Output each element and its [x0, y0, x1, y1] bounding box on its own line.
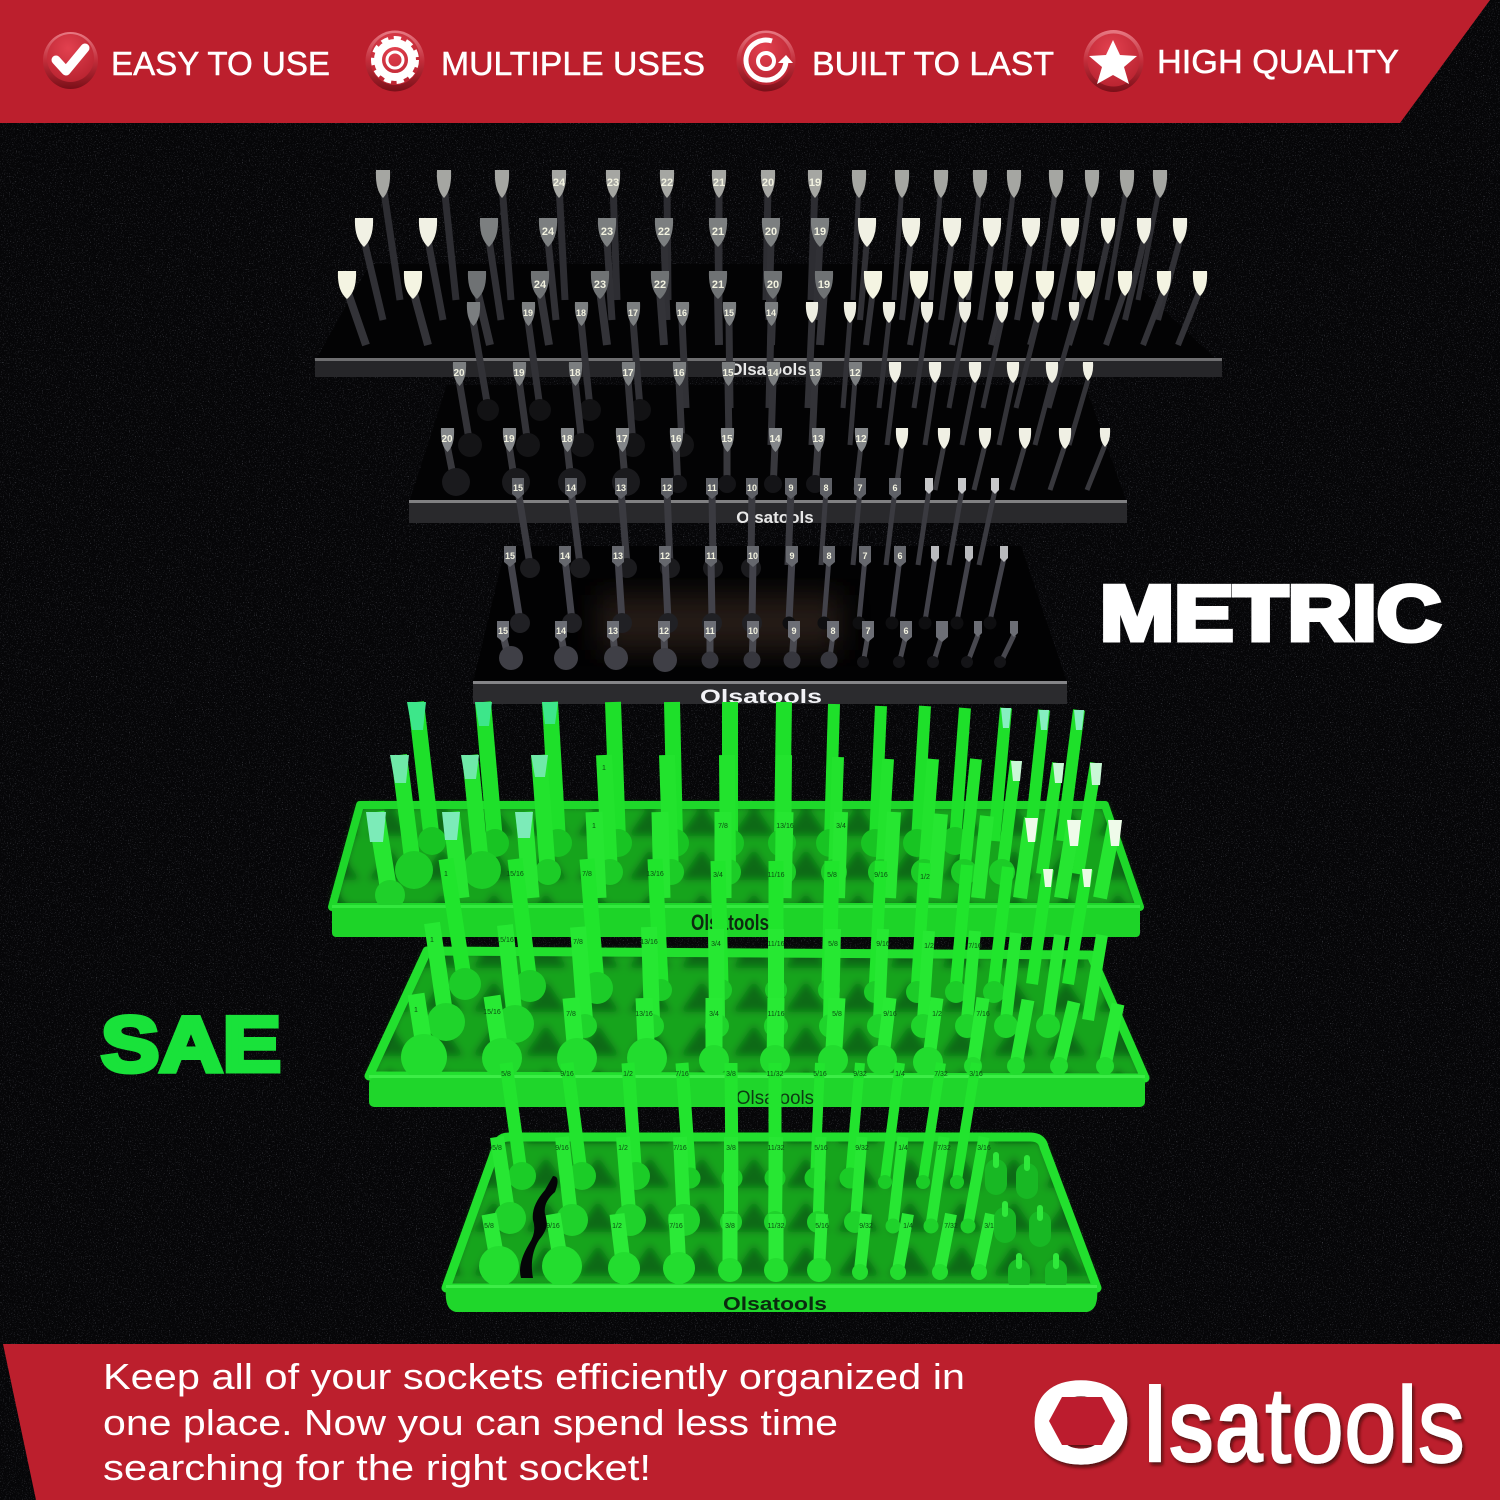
row 3 pegs: 15/16: [483, 1009, 501, 1016]
row 1 pegs: [376, 170, 1167, 300]
row 2 pegs: 9: [789, 551, 795, 561]
row 1 pegs: 3/8: [726, 1071, 736, 1078]
row 2 pegs: 10: [748, 551, 758, 561]
row 3 pegs: 15: [721, 434, 733, 445]
footer text: Keep all of your sockets efficiently organized in: [103, 1356, 965, 1397]
row 2 pegs: 24: [542, 226, 555, 238]
row 3 pegs: 7/8: [566, 1011, 576, 1018]
row 1 pegs: 15/16: [506, 871, 524, 878]
row 2 pegs: [390, 755, 1102, 874]
row 2 pegs: 5/16: [814, 1145, 828, 1152]
row 3 pegs: 11/16: [768, 1011, 785, 1018]
row 2 pegs: [355, 218, 1187, 320]
row 2 pegs: 8: [826, 551, 832, 561]
label: multiple uses: MULTIPLE USES: [441, 45, 705, 82]
footer text: [103, 1356, 965, 1488]
tray 3 logo: Olsatools: [700, 687, 822, 708]
row 3 pegs: 17: [616, 434, 628, 445]
tray 2 logo: Olsatools: [736, 1088, 814, 1109]
row 1 pegs: 1/2: [920, 874, 930, 881]
row 3 pegs: 20: [441, 434, 453, 445]
row 1 pegs: 5/8: [827, 872, 837, 879]
Olsatools logo: [1031, 1359, 1465, 1487]
SAE tray 3 (front, green): [446, 1063, 1097, 1314]
row 3 pegs: [497, 621, 1018, 664]
row 1 pegs: 7/8: [582, 871, 592, 878]
tray 3 front rim: [473, 681, 1067, 708]
row 1 pegs: 9/32: [853, 1071, 867, 1078]
tray 2 front rim: [369, 1075, 1145, 1109]
icon: gear: [366, 30, 424, 92]
row 2 pegs: 16: [673, 368, 685, 379]
row 3 pegs: 7/16: [669, 1223, 683, 1230]
row 3 pegs: 5/16: [815, 1223, 829, 1230]
row 2 pegs: 1: [602, 765, 606, 772]
row 3 pegs: 5/8: [832, 1011, 842, 1018]
row 3 pegs: [441, 428, 1110, 490]
row 1 pegs: 1/4: [895, 1071, 905, 1078]
row 3 pegs: 5/8: [484, 1223, 494, 1230]
row 3 pegs: [338, 271, 1207, 345]
icon: star: [1084, 30, 1144, 92]
row 1 pegs: [444, 859, 1092, 992]
row 1 pegs: 14: [766, 308, 776, 318]
row 1 pegs: 19: [809, 177, 821, 189]
row 1 pegs: 15: [513, 483, 523, 493]
row 2 pegs: 7/16: [673, 1145, 687, 1152]
footer text: one place. Now you can spend less time: [103, 1402, 838, 1443]
row 2 pegs: 13: [809, 368, 821, 379]
row 2 pegs: 20: [765, 226, 777, 238]
row 3 pegs: 12: [855, 434, 867, 445]
row 1 pegs: 19: [523, 308, 533, 318]
row 2 pegs: 5/8: [828, 941, 838, 948]
row 3 pegs: 3/4: [709, 1011, 719, 1018]
row 1 pegs: 22: [661, 177, 673, 189]
METRIC heading: METRIC: [1100, 569, 1441, 657]
row 3 pegs: 13: [812, 434, 824, 445]
row 3 pegs: 1/2: [932, 1011, 942, 1018]
row 3 pegs: 10: [748, 626, 758, 636]
row 3 pegs: 19: [503, 434, 515, 445]
row 2 pegs: 11: [706, 551, 716, 561]
row 2 pegs: 14: [767, 368, 779, 379]
row 1 pegs: 14: [566, 483, 576, 493]
row 3 pegs: 9/32: [859, 1223, 873, 1230]
row 3 pegs: 9/16: [883, 1011, 897, 1018]
row 2 pegs: [430, 923, 1102, 1026]
row 1 pegs: 5/8: [501, 1071, 511, 1078]
row 3 pegs: 7/32: [944, 1223, 958, 1230]
row 1 pegs: [467, 302, 1079, 410]
row 3 pegs: 1/2: [612, 1223, 622, 1230]
tray 1 logo: Olsatools: [691, 910, 769, 935]
row 3 pegs: 20: [767, 279, 779, 291]
row 3 pegs: 9: [791, 626, 797, 636]
row 2 pegs: 5/8: [492, 1145, 502, 1152]
row 2 pegs: 7/32: [937, 1145, 951, 1152]
row 1 pegs: [512, 478, 999, 568]
row 3 pegs: 14: [556, 626, 566, 636]
tray 3 front rim: [446, 1285, 1097, 1314]
row 1 pegs: 3/16: [969, 1071, 983, 1078]
row 2 pegs: 19: [814, 226, 826, 238]
label: easy to use: EASY TO USE: [111, 45, 330, 82]
row 3 pegs: 22: [654, 279, 666, 291]
row 2 pegs: 15: [722, 368, 734, 379]
footer text: searching for the right socket!: [103, 1447, 651, 1488]
row 1 pegs: 1/2: [623, 1071, 633, 1078]
row 3 pegs: 15: [498, 626, 508, 636]
row 1 pegs: 5/16: [813, 1071, 827, 1078]
row 3 pegs: 12: [659, 626, 669, 636]
tray 1 front rim: [315, 358, 1222, 379]
row 1 pegs: 10: [747, 483, 757, 493]
row 1 pegs: 9/16: [874, 872, 888, 879]
row 1 pegs: 7/16: [675, 1071, 689, 1078]
row 3 pegs: 24: [534, 279, 547, 291]
row 2 pegs: 3/16: [977, 1145, 991, 1152]
row 3 pegs: 19: [818, 279, 830, 291]
row 2 pegs: 1: [430, 937, 434, 944]
tray 2 logo: Olsatools: [736, 508, 814, 527]
row 2 pegs: [492, 1137, 991, 1226]
row 2 pegs: 15/16: [496, 937, 514, 944]
row 1 pegs: 17: [628, 308, 638, 318]
row 3 pegs: 7/16: [976, 1011, 990, 1018]
row 3 pegs: 6: [903, 626, 909, 636]
row 2 pegs: 6: [897, 551, 903, 561]
row 3 pegs: 1: [592, 823, 596, 830]
row 2 pegs: 7/8: [573, 939, 583, 946]
row 1 pegs: 21: [713, 177, 725, 189]
row 1 pegs: 18: [576, 308, 586, 318]
row 1 pegs: 11/16: [768, 872, 785, 879]
icon: check mark: [43, 32, 98, 89]
row 2 pegs: 23: [601, 226, 613, 238]
row 2 pegs: 11/32: [768, 1145, 785, 1152]
row 2 pegs: [453, 362, 1093, 445]
label: built to last: BUILT TO LAST: [812, 45, 1054, 82]
icon: circular arrow with gear: [736, 30, 796, 92]
row 2 pegs: 21: [712, 226, 724, 238]
row 3 pegs: 3/4: [836, 823, 846, 830]
row 3 pegs: [414, 994, 1118, 1066]
Olsatools logo: tools: [1265, 1364, 1465, 1485]
row 3 pegs: 8: [830, 626, 836, 636]
tray 1 logo: Olsatools: [729, 360, 807, 379]
metric tray 3 (front, black): [473, 478, 1067, 708]
row 1 pegs: 7: [857, 483, 863, 493]
row 3 pegs: 9/16: [546, 1223, 560, 1230]
row 2 pegs: 12: [849, 368, 861, 379]
row 2 pegs: 20: [453, 368, 465, 379]
row 2 pegs: 13/16: [640, 939, 658, 946]
row 2 pegs: 1/4: [898, 1145, 908, 1152]
row 3 pegs: 21: [712, 279, 724, 291]
tray 1 front rim: [332, 905, 1140, 937]
row 1 pegs: [407, 702, 1084, 843]
row 3 pegs: 18: [561, 434, 573, 445]
small drive nubs: [996, 1155, 1056, 1280]
row 1 pegs: [501, 1063, 983, 1182]
row 1 pegs: 13/16: [646, 871, 664, 878]
row 1 pegs: 3/4: [713, 872, 723, 879]
row 3 pegs: 3/8: [725, 1223, 735, 1230]
SAE tray 2 (middle, green): [369, 859, 1145, 1109]
row 2 pegs: 11/16: [768, 941, 785, 948]
row 3 pegs: 1/4: [903, 1223, 913, 1230]
row 1 pegs: 20: [762, 177, 774, 189]
row 1 pegs: 16: [677, 308, 687, 318]
row 3 pegs: 1: [414, 1007, 418, 1014]
Olsatools logo: lsa: [1143, 1364, 1264, 1485]
row 1 pegs: 13: [616, 483, 626, 493]
row 2 pegs: 14: [560, 551, 570, 561]
metric tray 2 (middle, black): [409, 302, 1127, 527]
row 2 pegs: 18: [569, 368, 581, 379]
row 3 pegs: 16: [670, 434, 682, 445]
SAE tray 1 (back, green): [332, 702, 1140, 937]
row 2 pegs: 22: [658, 226, 670, 238]
tray 2 front rim: [409, 500, 1127, 527]
row 1 pegs: 11: [707, 483, 717, 493]
row 2 pegs: 13: [613, 551, 623, 561]
row 3 pegs: 11: [705, 626, 715, 636]
row 3 pegs: 13/16: [776, 823, 794, 830]
row 3 pegs: 7/8: [718, 823, 728, 830]
row 1 pegs: 24: [553, 177, 566, 189]
footer banner: [3, 1344, 1500, 1500]
row 2 pegs: 3/8: [726, 1145, 736, 1152]
row 2 pegs: 19: [513, 368, 525, 379]
metric tray 1 (back, black): [315, 170, 1222, 379]
row 2 pegs: 3/4: [711, 941, 721, 948]
row 2 pegs: 7: [862, 551, 868, 561]
row 2 pegs: 1/2: [618, 1145, 628, 1152]
row 1 pegs: 11/32: [766, 1071, 784, 1078]
row 3 pegs: [366, 812, 1122, 898]
row 1 pegs: 12: [662, 483, 672, 493]
row 1 pegs: 9: [788, 483, 794, 493]
row 2 pegs: [504, 546, 1008, 623]
row 2 pegs: 1/2: [924, 943, 934, 950]
row 3 pegs: 13: [608, 626, 618, 636]
row 1 pegs: 8: [823, 483, 829, 493]
row 2 pegs: 15: [505, 551, 515, 561]
row 3 pegs: 7: [865, 626, 871, 636]
row 2 pegs: 7/16: [968, 943, 982, 950]
row 2 pegs: 9/32: [855, 1145, 869, 1152]
row 1 pegs: 23: [607, 177, 619, 189]
row 3 pegs: 3/16: [984, 1223, 998, 1230]
row 2 pegs: 17: [622, 368, 634, 379]
row 2 pegs: 12: [660, 551, 670, 561]
row 1 pegs: 9/16: [560, 1071, 574, 1078]
row 2 pegs: 9/16: [876, 941, 890, 948]
Olsatools logo: O: [1031, 1359, 1131, 1487]
row 3 pegs: 11/32: [768, 1223, 785, 1230]
label: high quality: HIGH QUALITY: [1157, 43, 1399, 80]
row 3 pegs: 13/16: [635, 1011, 653, 1018]
tray notch: [520, 1176, 558, 1278]
row 3 pegs: 14: [769, 434, 781, 445]
tray 3 logo: Olsatools: [723, 1294, 827, 1314]
row 1 pegs: 15: [724, 308, 734, 318]
row 3 pegs: 23: [594, 279, 606, 291]
row 1 pegs: 6: [892, 483, 898, 493]
header banner: [0, 0, 1490, 123]
SAE heading: SAE: [101, 1000, 281, 1088]
row 2 pegs: 9/16: [555, 1145, 569, 1152]
row 1 pegs: 1: [444, 871, 448, 878]
row 3 pegs: [484, 1214, 998, 1272]
row 1 pegs: 7/32: [934, 1071, 948, 1078]
